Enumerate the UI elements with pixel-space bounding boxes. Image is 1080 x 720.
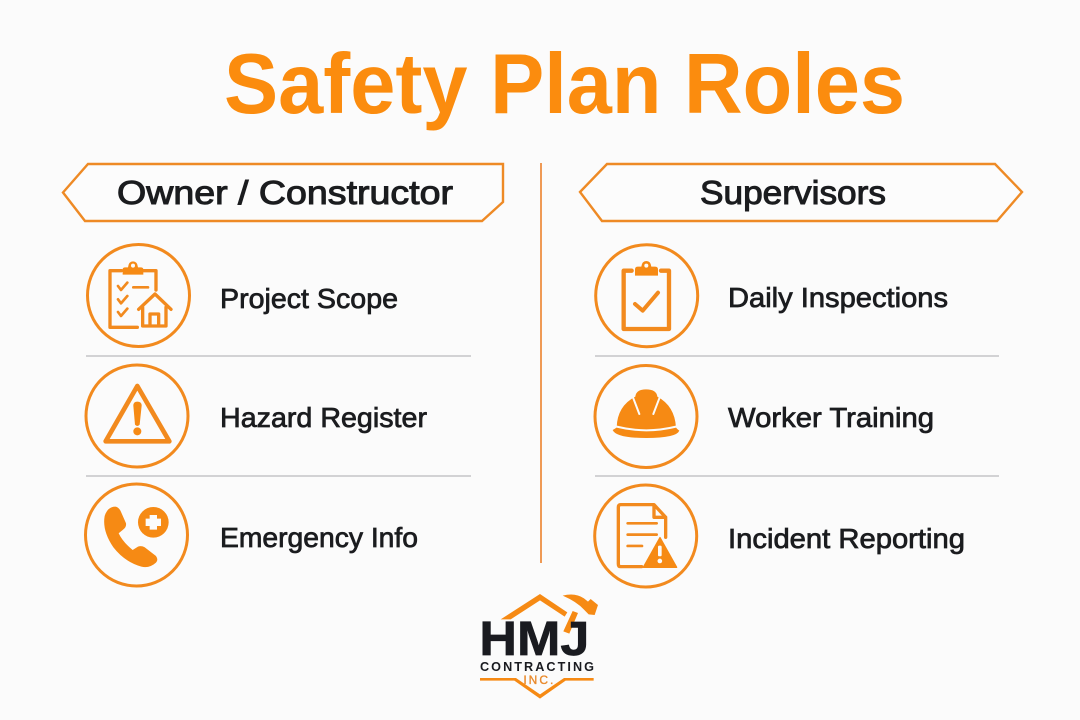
panel: supervisors: [580, 164, 1022, 587]
icon: clipboard with check: [596, 245, 698, 347]
label: daily inspections: Daily Inspections: [728, 282, 948, 313]
icon: clipboard with house: [88, 244, 190, 346]
icon: hammer: [563, 594, 598, 634]
label: project scope: Project Scope: [220, 283, 398, 314]
title: Safety Plan Roles: [224, 37, 905, 132]
logo: HMJ Contracting Inc.: [479, 594, 598, 699]
heading: owner / constructor: Owner / Constructor: [117, 174, 453, 211]
label: emergency info: Emergency Info: [220, 522, 418, 553]
icon: roof: [501, 594, 567, 619]
wordmark: inc.: INC.: [523, 673, 553, 687]
wordmark: contracting: CONTRACTING: [480, 660, 594, 674]
icon: warning triangle: [86, 365, 188, 467]
icon: phone with medical cross: [86, 484, 188, 586]
icon: base chevron: [480, 678, 594, 699]
label: worker training: Worker Training: [728, 402, 934, 433]
label: hazard register: Hazard Register: [220, 402, 427, 433]
heading: supervisors: [580, 164, 1022, 221]
icon: hard hat: [595, 366, 697, 468]
heading: owner / constructor: [63, 164, 503, 221]
label: incident reporting: Incident Reporting: [728, 523, 965, 554]
heading: supervisors: Supervisors: [700, 174, 886, 211]
icon: document with warning: [595, 485, 697, 587]
panel: owner / constructor: [63, 164, 503, 586]
wordmark: HMJ: HMJ: [479, 612, 589, 666]
